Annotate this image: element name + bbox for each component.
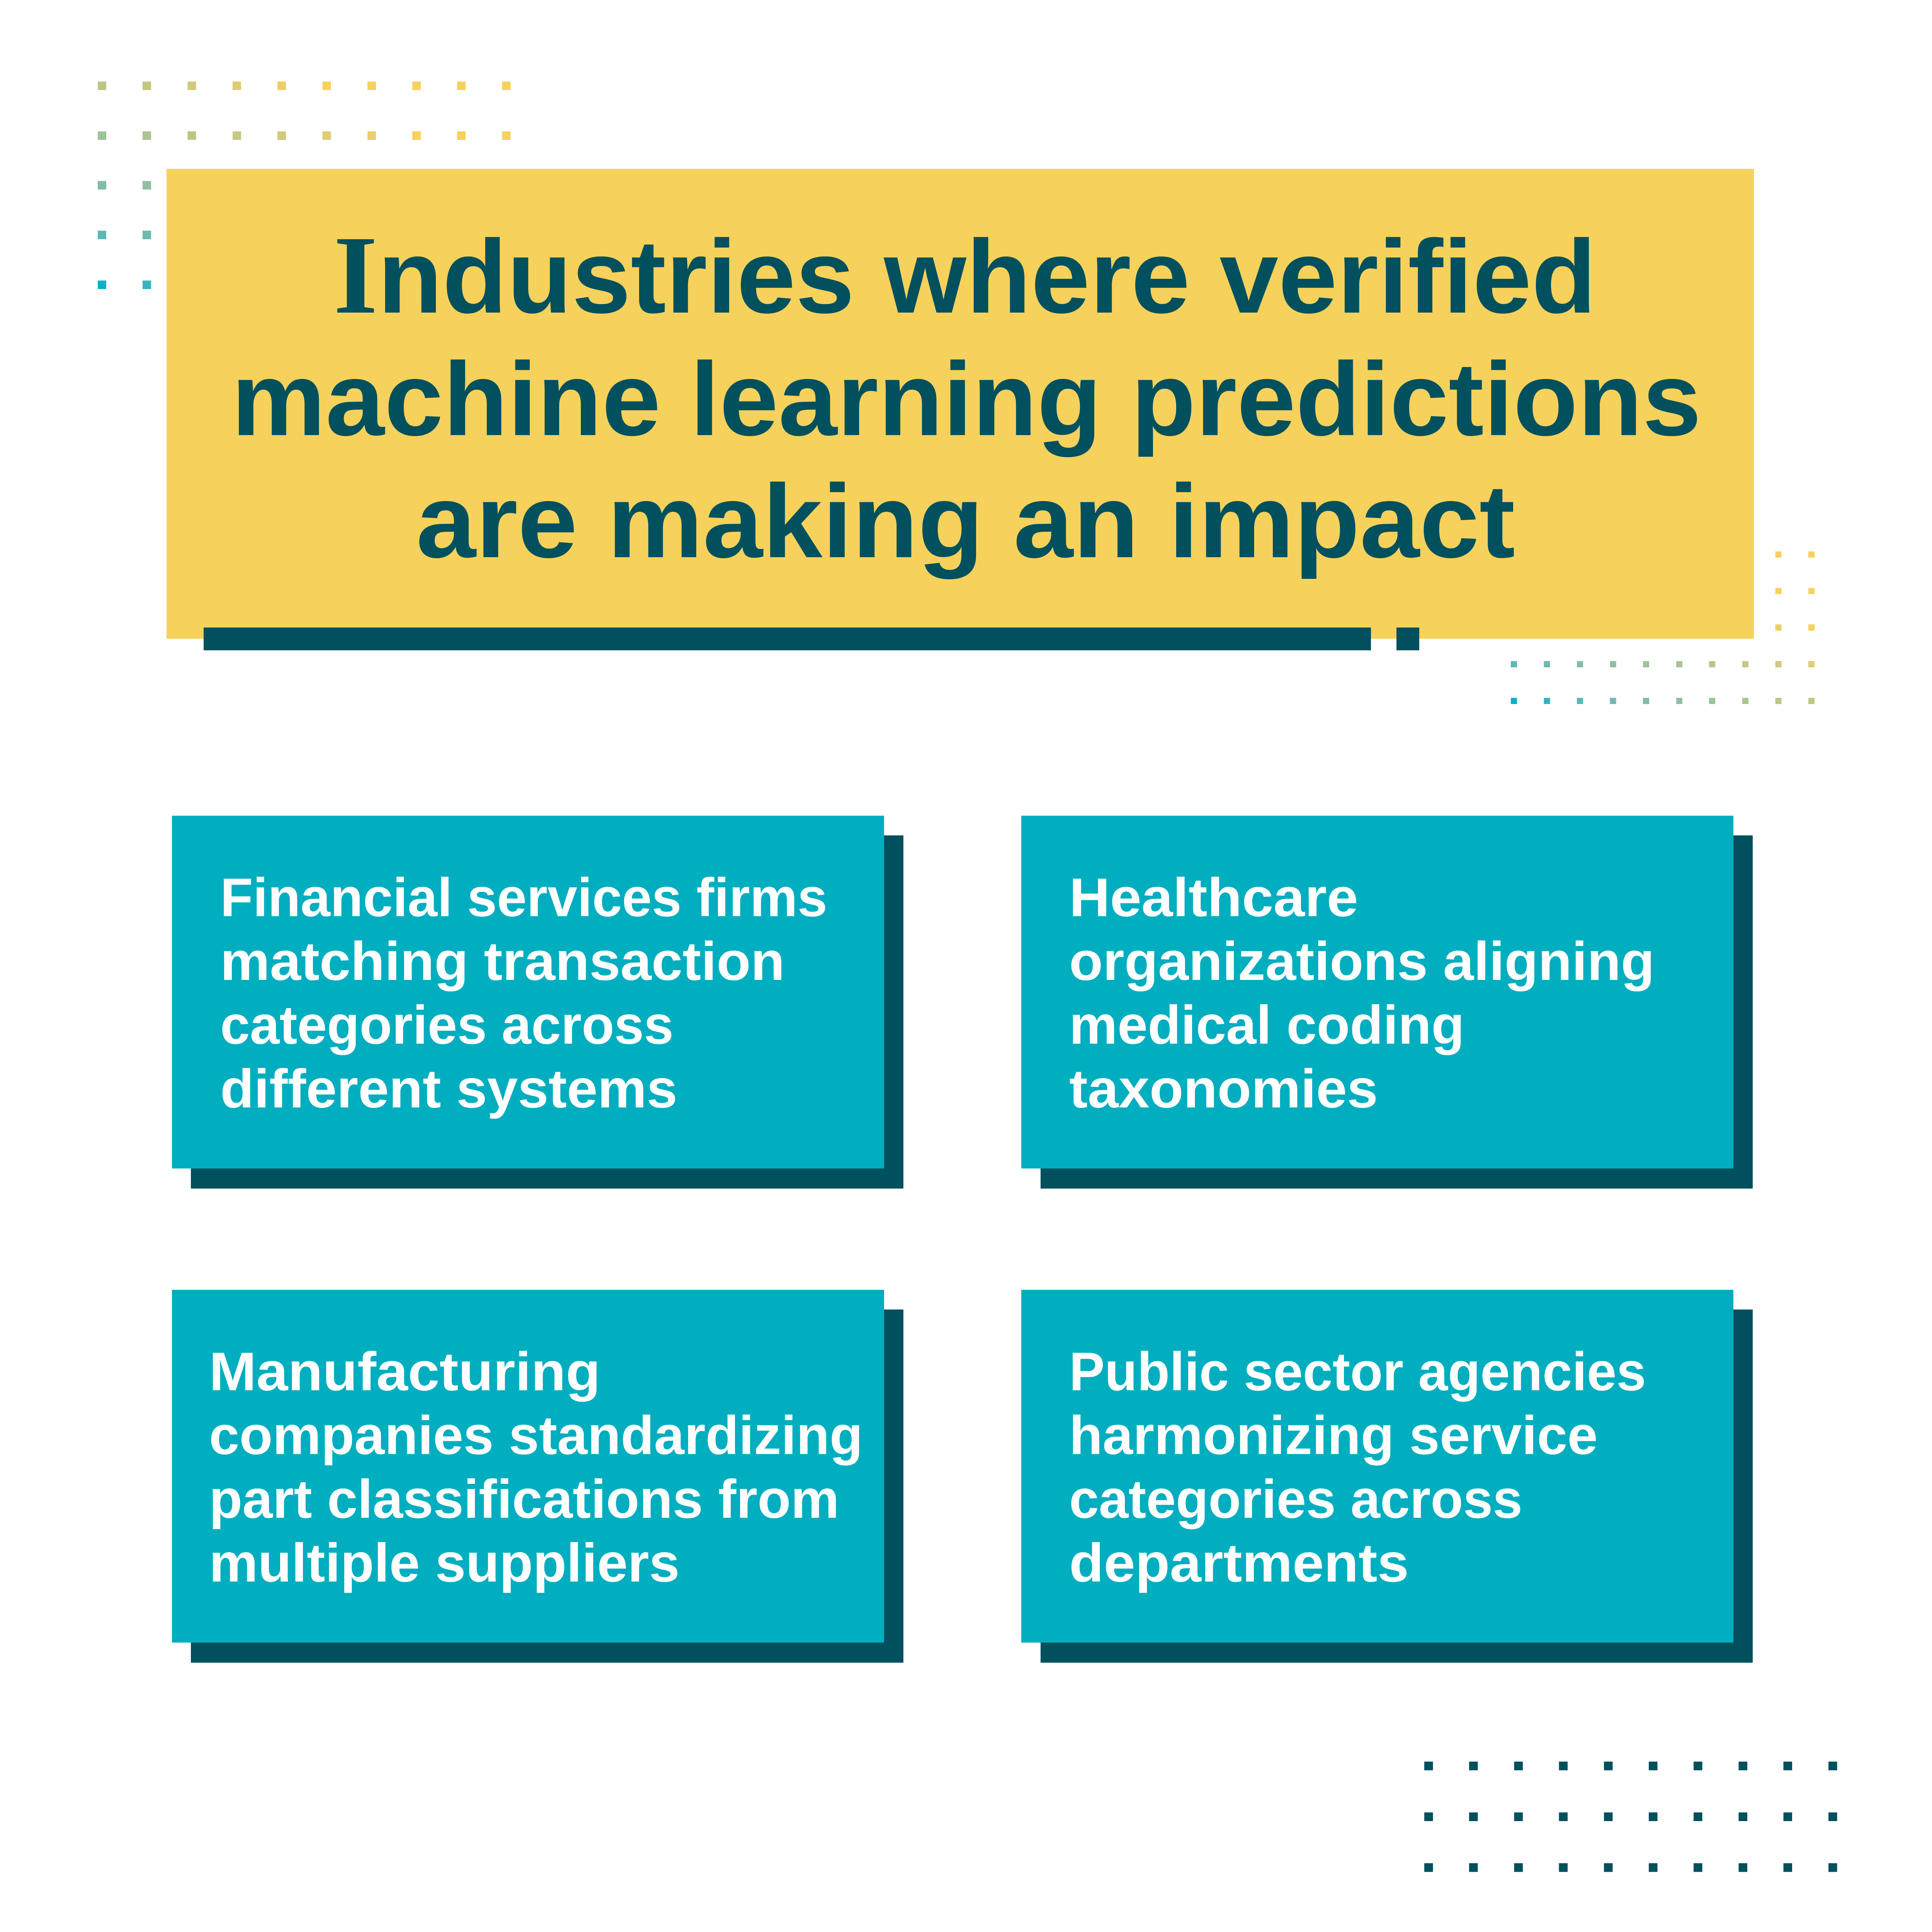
card text: manufacturing: part classifications from (209, 1468, 839, 1529)
card text: healthcare (1069, 867, 1655, 1119)
card text: public sector: categories across (1069, 1468, 1522, 1529)
panel: public sector card (1021, 1290, 1753, 1663)
card text: manufacturing: multiple suppliers (209, 1532, 680, 1593)
card text: financial services: Financial services firms (220, 867, 827, 928)
title underline square (1396, 628, 1419, 650)
title: are making an impact (416, 463, 1515, 580)
dot pattern: right of title (1511, 551, 1815, 704)
title (231, 213, 1701, 580)
card text: financial services: categories across (220, 994, 673, 1055)
card text: public sector: harmonizing service (1069, 1405, 1598, 1466)
card text: healthcare: Healthcare (1069, 867, 1358, 928)
card text: manufacturing (209, 1341, 863, 1593)
card text: financial services (220, 867, 827, 1119)
card text: financial services: matching transaction (220, 930, 785, 992)
card text: healthcare: medical coding (1069, 994, 1464, 1055)
panel: title banner (167, 169, 1754, 650)
title: machine learning predictions (231, 341, 1701, 458)
panel: financial services card (172, 816, 903, 1189)
panel: manufacturing card (172, 1290, 903, 1663)
card text: public sector (1069, 1341, 1646, 1593)
card text: manufacturing: Manufacturing (209, 1341, 600, 1402)
card text: healthcare: organizations aligning (1069, 930, 1655, 992)
dot pattern: top left (98, 82, 511, 289)
card text: public sector: Public sector agencies (1069, 1341, 1646, 1402)
card text: healthcare: taxonomies (1069, 1058, 1378, 1119)
card text: manufacturing: companies standardizing (209, 1405, 863, 1466)
dot pattern: bottom right (1424, 1762, 1837, 1872)
card text: financial services: different systems (220, 1058, 677, 1119)
title underline bar (204, 628, 1371, 650)
title: Industries where verified (333, 213, 1596, 337)
panel: healthcare card (1021, 816, 1753, 1189)
card text: public sector: departments (1069, 1532, 1409, 1593)
